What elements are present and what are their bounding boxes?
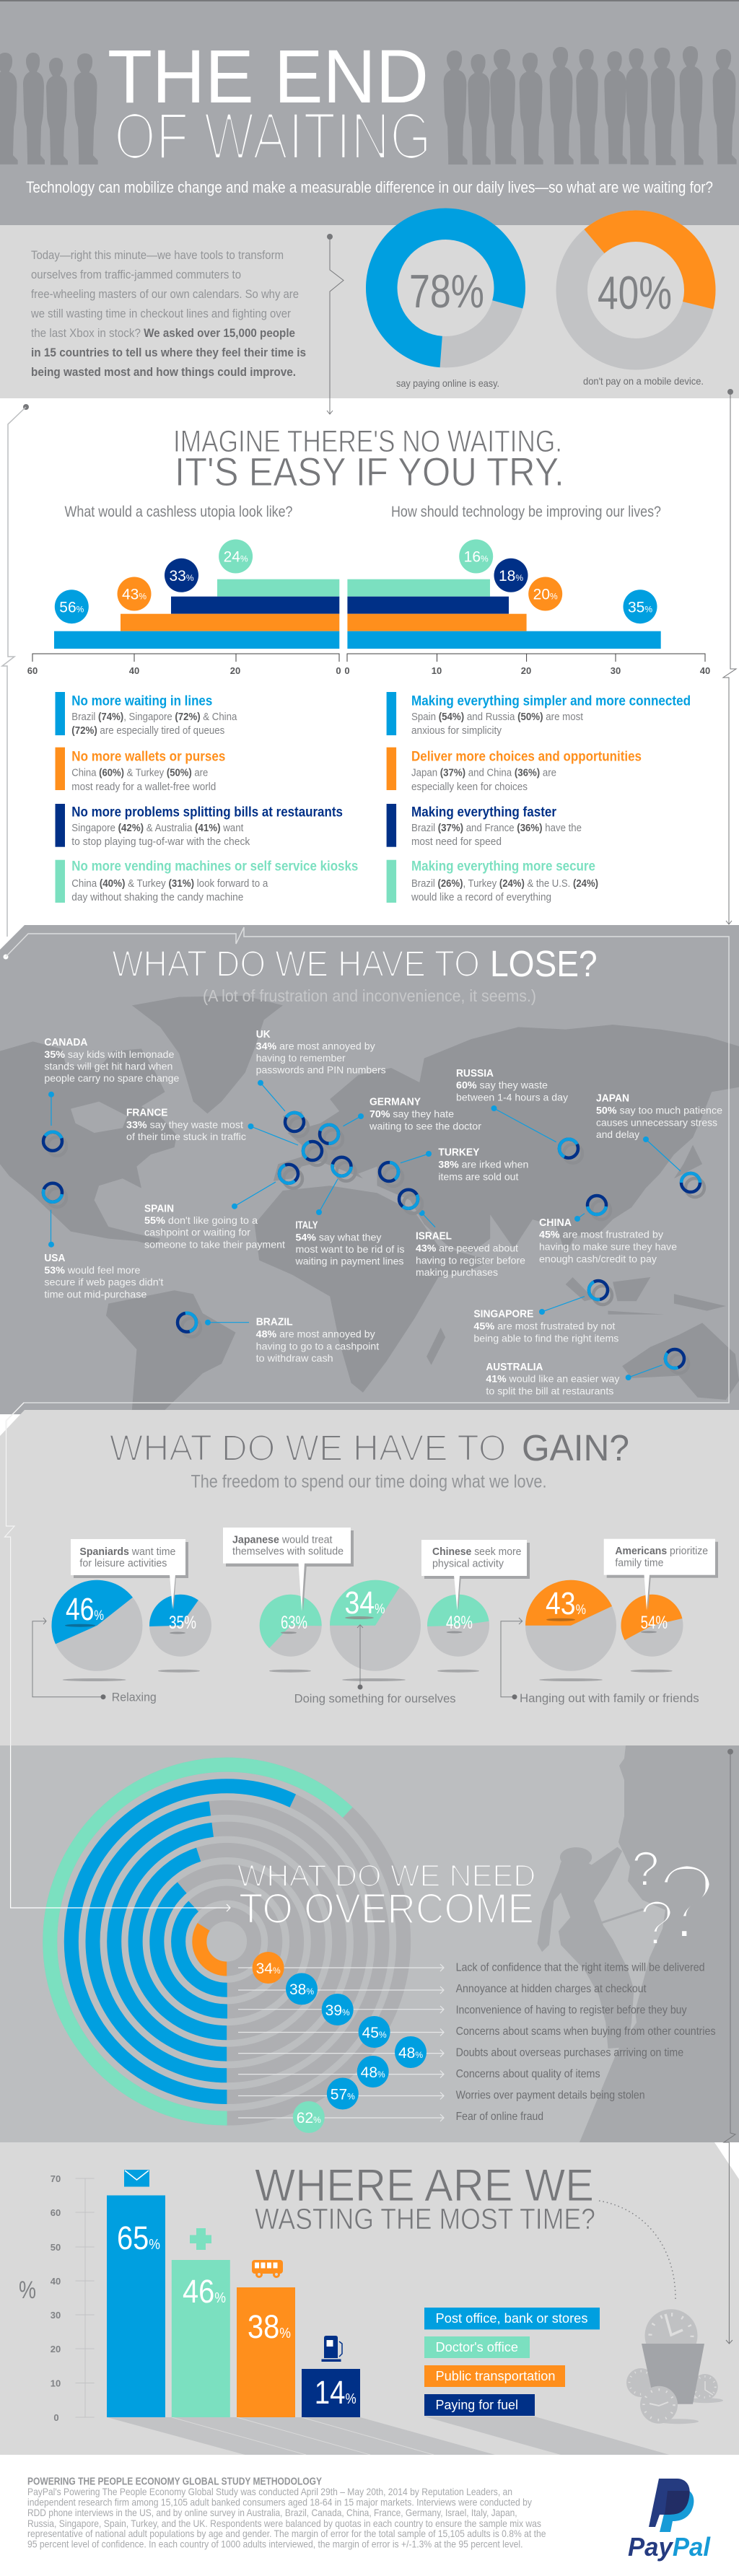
legend item: more choices: Deliver more choices and opportunities xyxy=(411,750,642,765)
y axis: 0 xyxy=(53,2412,59,2423)
legend item: more choices xyxy=(387,748,642,793)
bar chart: cashless utopia: 24% xyxy=(224,548,248,566)
bar chart: improving our lives: 20% xyxy=(533,586,558,603)
panel: what do we need to overcome xyxy=(0,1745,739,2142)
pie: Spain big 46 percent: 46% xyxy=(66,1592,104,1627)
legend item: splitting bills: No more problems splitting bills at restaurants xyxy=(71,805,343,820)
map marker: Australia: AUSTRALIA xyxy=(486,1361,543,1373)
barrier labels: Annoyance at hidden charges at checkout xyxy=(456,1983,647,1995)
legend item: more choices: especially keen for choices xyxy=(411,781,528,793)
callout: Chinese: physical activity xyxy=(432,1558,504,1570)
map marker: Japan: 50% say too much patience xyxy=(596,1105,722,1116)
bar: post office 65 percent xyxy=(107,2170,165,2417)
map marker: USA: secure if web pages didn't xyxy=(44,1276,164,1288)
callout: Japanese: themselves with solitude xyxy=(232,1545,344,1557)
callout: Americans: family time xyxy=(615,1557,663,1569)
legend: fuel: Paying for fuel xyxy=(436,2398,518,2412)
methodology text: 95 percent level of confidence. In each country of 1000 adults interviewed, the margin of error is +/-1.3% at the 95 percent level. xyxy=(27,2538,522,2550)
donut chart: 40 percent: don't pay on a mobile device. xyxy=(583,375,704,387)
axes: 40 xyxy=(129,665,139,676)
map marker: Canada: people carry no spare change xyxy=(44,1072,180,1084)
map marker: China: 45% are most frustrated by xyxy=(539,1229,663,1240)
methodology heading: POWERING THE PEOPLE ECONOMY GLOBAL STUDY METHODOLOGY xyxy=(27,2476,322,2488)
heading: LOSE? xyxy=(490,943,598,984)
legend: doctor xyxy=(424,2336,530,2358)
title xyxy=(108,35,432,173)
map marker: China xyxy=(539,1194,677,1264)
map marker: Spain xyxy=(144,1160,302,1250)
subheading: (A lot of frustration and inconvenience, it seems.) xyxy=(203,986,536,1005)
donut chart: 40 percent xyxy=(546,200,726,387)
methodology text: representative of national adult populations by age and gender. The margin of error for the total sample of 15,105 adults is 0.8% at the xyxy=(27,2528,546,2539)
map marker: Spain: cashpoint or waiting for xyxy=(144,1227,250,1238)
illustration: climber xyxy=(538,1847,643,2049)
map marker: Japan: JAPAN xyxy=(596,1092,629,1105)
intro paragraph xyxy=(30,248,306,379)
axes: 30 xyxy=(611,665,621,676)
connector line right xyxy=(724,1749,735,2142)
map marker: UK xyxy=(256,1028,386,1136)
pie: Japan small 63 percent xyxy=(260,1595,322,1657)
legend item: vending machines xyxy=(55,859,358,903)
logo: PayPal xyxy=(628,2479,711,2562)
pie: Spain small 35 percent xyxy=(149,1595,211,1657)
heading: IT'S EASY IF YOU TRY. xyxy=(175,449,564,494)
pie: China small 48 percent: 48% xyxy=(446,1613,473,1633)
percent bubbles: 62% xyxy=(297,2110,321,2126)
panel: header xyxy=(0,0,739,225)
map marker: USA: 53% would feel more xyxy=(44,1264,141,1276)
map marker: Israel: ISRAEL xyxy=(416,1230,452,1243)
title: OF WAITING xyxy=(114,100,432,173)
heading: WHAT DO WE NEED xyxy=(237,1859,535,1893)
legend: post office: Post office, bank or stores xyxy=(436,2311,587,2326)
legend item: more secure: would like a record of everything xyxy=(411,891,551,903)
map marker: Turkey: items are sold out xyxy=(438,1170,519,1182)
callout: Japanese: Japanese would treat xyxy=(232,1533,333,1546)
map marker: Australia: to split the bill at restaurants xyxy=(486,1385,613,1397)
legend item: simpler and more connected: Spain (54%) and Russia (50%) are most xyxy=(411,711,584,723)
map marker: Spain: SPAIN xyxy=(144,1202,174,1214)
icon: medical cross xyxy=(190,2228,211,2250)
map marker: Italy xyxy=(294,1157,404,1267)
barrier labels: Lack of confidence that the right items will be delivered xyxy=(456,1961,705,1974)
bar: post office 65 percent: 65% xyxy=(117,2220,160,2256)
frame arrow into heading xyxy=(11,1745,230,1911)
legend item: more secure: Making everything more secure xyxy=(411,859,595,875)
legend item: no more wallets: most ready for a wallet-free world xyxy=(71,781,216,793)
bar shadows xyxy=(107,2417,670,2455)
map marker: France: 33% say they waste most xyxy=(126,1118,243,1130)
map marker: Brazil: having to go to a cashpoint xyxy=(256,1340,379,1351)
pie: China small 48 percent xyxy=(427,1595,489,1657)
barrier labels xyxy=(456,1961,716,2123)
subheading: right chart: How should technology be improving our lives? xyxy=(391,504,661,520)
map marker: Russia xyxy=(456,1067,582,1163)
legend item: no more wallets: China (60%) & Turkey (50%) are xyxy=(71,767,208,779)
map marker: Brazil: to withdraw cash xyxy=(256,1352,333,1364)
legend item: no more waiting in lines: Brazil (74%), Singapore (72%) & China xyxy=(71,711,237,723)
map marker: France: of their time stuck in traffic xyxy=(126,1131,246,1142)
barrier labels: Worries over payment details being stolen xyxy=(456,2089,645,2101)
heading: WASTING THE MOST TIME? xyxy=(255,2202,595,2235)
y axis: 60 xyxy=(51,2207,61,2218)
map marker: Singapore: being able to find the right items xyxy=(473,1332,618,1344)
legend: transport xyxy=(424,2365,565,2387)
intro paragraph: ourselves from traffic-jammed commuters to xyxy=(31,268,241,281)
legend item: more secure: Brazil (26%), Turkey (24%) & the U.S. (24%) xyxy=(411,877,598,890)
pie: Japan big 34 percent xyxy=(330,1580,421,1671)
bracket label: hanging out: Hanging out with family or friends xyxy=(520,1691,699,1705)
intro paragraph: Today—right this minute—we have tools to transform xyxy=(31,248,284,262)
map marker: Singapore: SINGAPORE xyxy=(473,1308,533,1320)
axes: 0 xyxy=(344,665,350,676)
donut chart: 78 percent: 78% xyxy=(409,265,484,317)
illustration: clocks in a pot xyxy=(626,2309,723,2424)
icon: envelope xyxy=(124,2170,149,2186)
legend item: more secure xyxy=(387,859,598,903)
heading: WHERE ARE WE xyxy=(255,2160,594,2211)
callout: Japanese xyxy=(223,1528,354,1611)
legend item: faster: Brazil (37%) and France (36%) have the xyxy=(411,822,582,834)
legend item: simpler and more connected: Making everything simpler and more connected xyxy=(411,694,691,709)
y axis xyxy=(19,2173,95,2423)
methodology text: Russia, Singapore, Spain, Turkey, and the UK. Respondents were balanced by quotas in each country to ensure the sample mix was xyxy=(27,2518,541,2529)
callout: Chinese xyxy=(421,1540,530,1611)
icon: bus xyxy=(252,2260,283,2278)
legend: doctor: Doctor's office xyxy=(436,2340,518,2354)
pie: Spain big 46 percent xyxy=(52,1580,143,1671)
connector arrow: intro xyxy=(327,234,344,414)
map marker: Israel xyxy=(396,1186,525,1278)
ground shadows xyxy=(63,1670,673,1681)
pie: family small 54 percent xyxy=(621,1595,683,1657)
map marker: Japan xyxy=(596,1092,722,1197)
map marker: Italy: waiting in payment lines xyxy=(294,1256,404,1267)
heading: IMAGINE THERE'S NO WAITING. xyxy=(173,424,562,459)
bracket label: relaxing xyxy=(32,1618,157,1704)
axes: 60 xyxy=(27,665,38,676)
map marker: Germany: 70% say they hate xyxy=(370,1108,454,1120)
legend item: faster: most need for speed xyxy=(411,836,502,848)
map marker: Israel: 43% are peeved about xyxy=(416,1243,518,1254)
heading xyxy=(237,1859,535,1932)
intro paragraph: in 15 countries to tell us where they feel their time is xyxy=(31,346,306,359)
bar chart: cashless utopia: 43% xyxy=(122,586,147,603)
axes: 20 xyxy=(230,665,240,676)
percent bubbles: 45% xyxy=(362,2025,387,2041)
heading: TO OVERCOME xyxy=(239,1885,534,1932)
map marker: Russia: 60% say they waste xyxy=(456,1079,548,1091)
bar chart: improving our lives: 18% xyxy=(499,568,523,584)
legend item: no more waiting in lines xyxy=(55,692,237,737)
y axis: 50 xyxy=(51,2242,61,2253)
y axis: 30 xyxy=(51,2310,61,2321)
percent bubbles: 34% xyxy=(256,1961,281,1977)
legend item: no more waiting in lines: (72%) are especially tired of queues xyxy=(71,724,224,737)
barrier labels: Doubts about overseas purchases arriving on time xyxy=(456,2046,683,2059)
map marker: France xyxy=(126,1107,326,1165)
bracket label: doing something for ourselves: Doing something for ourselves xyxy=(294,1691,456,1705)
map marker: Russia: RUSSIA xyxy=(456,1067,494,1079)
y axis: 10 xyxy=(51,2378,61,2388)
bar chart: cashless utopia: 56% xyxy=(59,599,84,616)
barrier labels: Fear of online fraud xyxy=(456,2111,543,2123)
intro paragraph: the last Xbox in stock? We asked over 15,000 people xyxy=(31,326,295,340)
percent bubbles xyxy=(253,1952,427,2133)
donut chart: 78 percent xyxy=(377,219,515,389)
connector arrow xyxy=(726,2142,733,2344)
axes: 40 xyxy=(700,665,710,676)
subheading: The freedom to spend our time doing what we love. xyxy=(191,1472,547,1492)
y axis: % xyxy=(19,2277,36,2304)
panel: footer methodology xyxy=(0,2455,739,2576)
icon: question marks: ? xyxy=(639,1887,674,1958)
pie: family big 43 percent: 43% xyxy=(546,1586,586,1621)
axes xyxy=(27,654,710,676)
callout: Spaniards: for leisure activities xyxy=(79,1557,167,1569)
intro paragraph: being wasted most and how things could improve. xyxy=(31,365,296,379)
map marker: Turkey: TURKEY xyxy=(438,1147,479,1159)
map marker: Singapore xyxy=(473,1279,618,1344)
bracket label: doing something for ourselves xyxy=(294,1625,456,1705)
legend: fuel xyxy=(424,2394,535,2416)
barrier labels: Concerns about quality of items xyxy=(456,2068,600,2080)
legend item: no more wallets: No more wallets or purses xyxy=(71,750,225,765)
legend item: splitting bills: Singapore (42%) & Australia (41%) want xyxy=(71,822,244,834)
bar chart: improving our lives xyxy=(347,540,661,649)
map marker: USA xyxy=(42,1182,164,1300)
map marker: Brazil xyxy=(176,1312,379,1364)
percent bubbles: 39% xyxy=(325,2002,350,2019)
map marker: UK: UK xyxy=(256,1028,271,1041)
legend: post office xyxy=(424,2308,600,2329)
map marker: Australia xyxy=(486,1346,688,1397)
percent bubbles: 48% xyxy=(398,2045,423,2062)
legend item: simpler and more connected: anxious for simplicity xyxy=(411,724,502,737)
map marker: UK: passwords and PIN numbers xyxy=(256,1064,386,1076)
map marker: Germany xyxy=(317,1096,481,1149)
map marker: Italy: most want to be rid of is xyxy=(296,1243,404,1255)
axes: 0 xyxy=(336,665,341,676)
map marker: Germany: GERMANY xyxy=(370,1096,421,1108)
legend item: faster xyxy=(387,804,582,848)
y axis: 20 xyxy=(51,2344,61,2354)
heading: WHAT DO WE HAVE TO xyxy=(110,1427,507,1468)
map marker: Spain: 55% don't like going to a xyxy=(144,1214,258,1226)
bar chart: improving our lives: 35% xyxy=(628,599,652,616)
legend item: no more waiting in lines: No more waiting in lines xyxy=(71,694,212,709)
map marker: Japan: and delay xyxy=(596,1129,639,1140)
pie: Japan big 34 percent: 34% xyxy=(345,1585,385,1621)
map marker: Turkey: 38% are irked when xyxy=(438,1159,528,1170)
bar chart: cashless utopia xyxy=(54,540,339,649)
map marker: Brazil: BRAZIL xyxy=(256,1316,293,1328)
legend item: vending machines: day without shaking the candy machine xyxy=(71,891,243,903)
logo: PayPal: PayPal xyxy=(628,2532,711,2562)
icon: question marks: ? xyxy=(656,1841,716,1962)
barrier labels: Inconvenience of having to register before they buy xyxy=(456,2005,687,2016)
map marker: Italy: ITALY xyxy=(296,1219,318,1232)
map marker: UK: 34% are most annoyed by xyxy=(256,1041,375,1052)
bar chart: cashless utopia: 33% xyxy=(169,568,194,584)
dotted curve xyxy=(599,2201,675,2299)
icon: question marks: ? xyxy=(632,1841,659,1896)
map marker: Russia: between 1-4 hours a day xyxy=(456,1092,568,1103)
frame line: gain xyxy=(4,1403,24,1745)
map marker: France: FRANCE xyxy=(126,1107,167,1119)
donut chart: 40 percent: 40% xyxy=(598,266,672,319)
legend item: faster: Making everything faster xyxy=(411,805,557,820)
map marker: China: enough cash/credit to pay xyxy=(539,1253,657,1264)
pie: Japan small 63 percent: 63% xyxy=(281,1613,307,1633)
frame line: map xyxy=(3,927,729,1660)
map marker: Canada: 35% say kids with lemonade xyxy=(44,1048,175,1060)
pie: family small 54 percent: 54% xyxy=(641,1613,668,1633)
map marker: Canada xyxy=(40,1036,180,1156)
map marker: Turkey xyxy=(379,1147,528,1186)
legend item: splitting bills: to stop playing tug-of-war with the check xyxy=(71,836,250,848)
world map xyxy=(0,996,739,1410)
map marker: Brazil: 48% are most annoyed by xyxy=(256,1328,375,1339)
map marker: UK: having to remember xyxy=(256,1052,346,1064)
legend item: splitting bills xyxy=(55,804,343,848)
legend item: no more wallets xyxy=(55,748,225,793)
legend item: more choices: Japan (37%) and China (36%) are xyxy=(411,767,556,779)
bar: fuel 14 percent xyxy=(302,2336,360,2417)
heading xyxy=(173,424,564,494)
callout: Americans xyxy=(604,1539,718,1611)
bar: doctor 46 percent xyxy=(172,2228,230,2417)
pie: family big 43 percent xyxy=(525,1580,616,1671)
map marker: Canada: stands will get hit hard when xyxy=(44,1061,172,1072)
heading: GAIN? xyxy=(522,1427,629,1468)
illustration: rock face xyxy=(580,1745,739,2142)
bar: transport 38 percent: 38% xyxy=(248,2308,291,2345)
connector arrow: down to next section (white panel) xyxy=(2,390,736,937)
map marker: Spain: someone to take their payment xyxy=(144,1239,285,1250)
donut chart: 78 percent: say paying online is easy. xyxy=(396,377,499,389)
legend item: vending machines: China (40%) & Turkey (31%) look forward to a xyxy=(71,877,268,890)
legend item: vending machines: No more vending machines or self service kiosks xyxy=(71,859,358,875)
icon: fuel pump xyxy=(322,2336,342,2362)
methodology text xyxy=(27,2486,546,2550)
map marker: Singapore: 45% are most frustrated by not xyxy=(473,1320,616,1331)
bar: fuel 14 percent: 14% xyxy=(315,2374,357,2411)
percent bubbles: 48% xyxy=(361,2064,385,2081)
legend: transport: Public transportation xyxy=(436,2369,556,2383)
axes: 10 xyxy=(432,665,442,676)
bar chart: improving our lives: 16% xyxy=(464,548,489,566)
axes: 20 xyxy=(521,665,531,676)
percent bubbles: 57% xyxy=(331,2087,355,2103)
callout: Americans: Americans prioritize xyxy=(615,1545,708,1557)
map marker: Israel: making purchases xyxy=(416,1266,498,1278)
leader lines xyxy=(238,1964,444,2121)
callout: Spaniards: Spaniards want time xyxy=(79,1546,175,1558)
panel: where are we wasting the most time xyxy=(0,2142,739,2455)
map marker: Israel: having to register before xyxy=(416,1254,525,1266)
title: THE END xyxy=(108,35,429,119)
panel: imagine there's no waiting xyxy=(0,390,739,937)
bracket label: hanging out xyxy=(501,1618,699,1705)
map marker: USA: time out mid-purchase xyxy=(44,1288,147,1300)
subheading: left chart: What would a cashless utopia look like? xyxy=(65,504,293,520)
pie: Spain small 35 percent: 35% xyxy=(169,1613,196,1633)
methodology text: PayPal's Powering The People Economy Global Study was conducted April 29th – May 20th, 2014 by Reputation Leaders, an xyxy=(27,2486,512,2497)
map marker: China: having to make sure they have xyxy=(539,1241,677,1253)
heading: WHAT DO WE HAVE TO xyxy=(112,943,480,984)
legend item: simpler and more connected xyxy=(387,692,691,737)
callout: Chinese: Chinese seek more xyxy=(432,1546,521,1558)
bar: doctor 46 percent: 46% xyxy=(183,2273,226,2310)
intro paragraph: we still wasting time in checkout lines and fighting over xyxy=(30,307,291,320)
map marker: China: CHINA xyxy=(539,1217,572,1229)
bar: transport 38 percent xyxy=(237,2260,295,2417)
percent bubbles: 38% xyxy=(289,1981,314,1998)
callout: Spaniards xyxy=(71,1539,188,1610)
map marker: Japan: causes unnecessary stress xyxy=(596,1116,717,1128)
heading xyxy=(255,2160,595,2235)
panel: introduction xyxy=(0,200,739,414)
methodology text: RDD phone interviews in the US, and by online survey in Australia, Brazil, Canada, China, France, Germany, Israel, Italy, Japan, xyxy=(27,2507,517,2518)
panel: what do we have to lose xyxy=(0,925,739,1660)
y axis: 70 xyxy=(51,2173,61,2184)
map marker: Germany: waiting to see the doctor xyxy=(369,1121,481,1132)
intro paragraph: free-wheeling masters of our own calendars. So why are xyxy=(31,287,299,301)
y axis: 40 xyxy=(51,2276,61,2287)
concentric ring chart xyxy=(50,1765,403,2119)
panel: what do we have to gain xyxy=(0,1403,739,1745)
bracket label: relaxing: Relaxing xyxy=(112,1691,157,1704)
map marker: Australia: 41% would like an easier way xyxy=(486,1373,619,1385)
methodology text: independent research firm among 15,105 adult banked consumers aged 18-64 in 15 major markets. Interviews were conducted by xyxy=(27,2497,532,2508)
illustration: silhouettes of people queuing xyxy=(0,46,737,165)
map marker: Italy: 54% say what they xyxy=(296,1231,381,1243)
map marker: Canada: CANADA xyxy=(44,1036,88,1048)
map marker: USA: USA xyxy=(44,1252,66,1264)
